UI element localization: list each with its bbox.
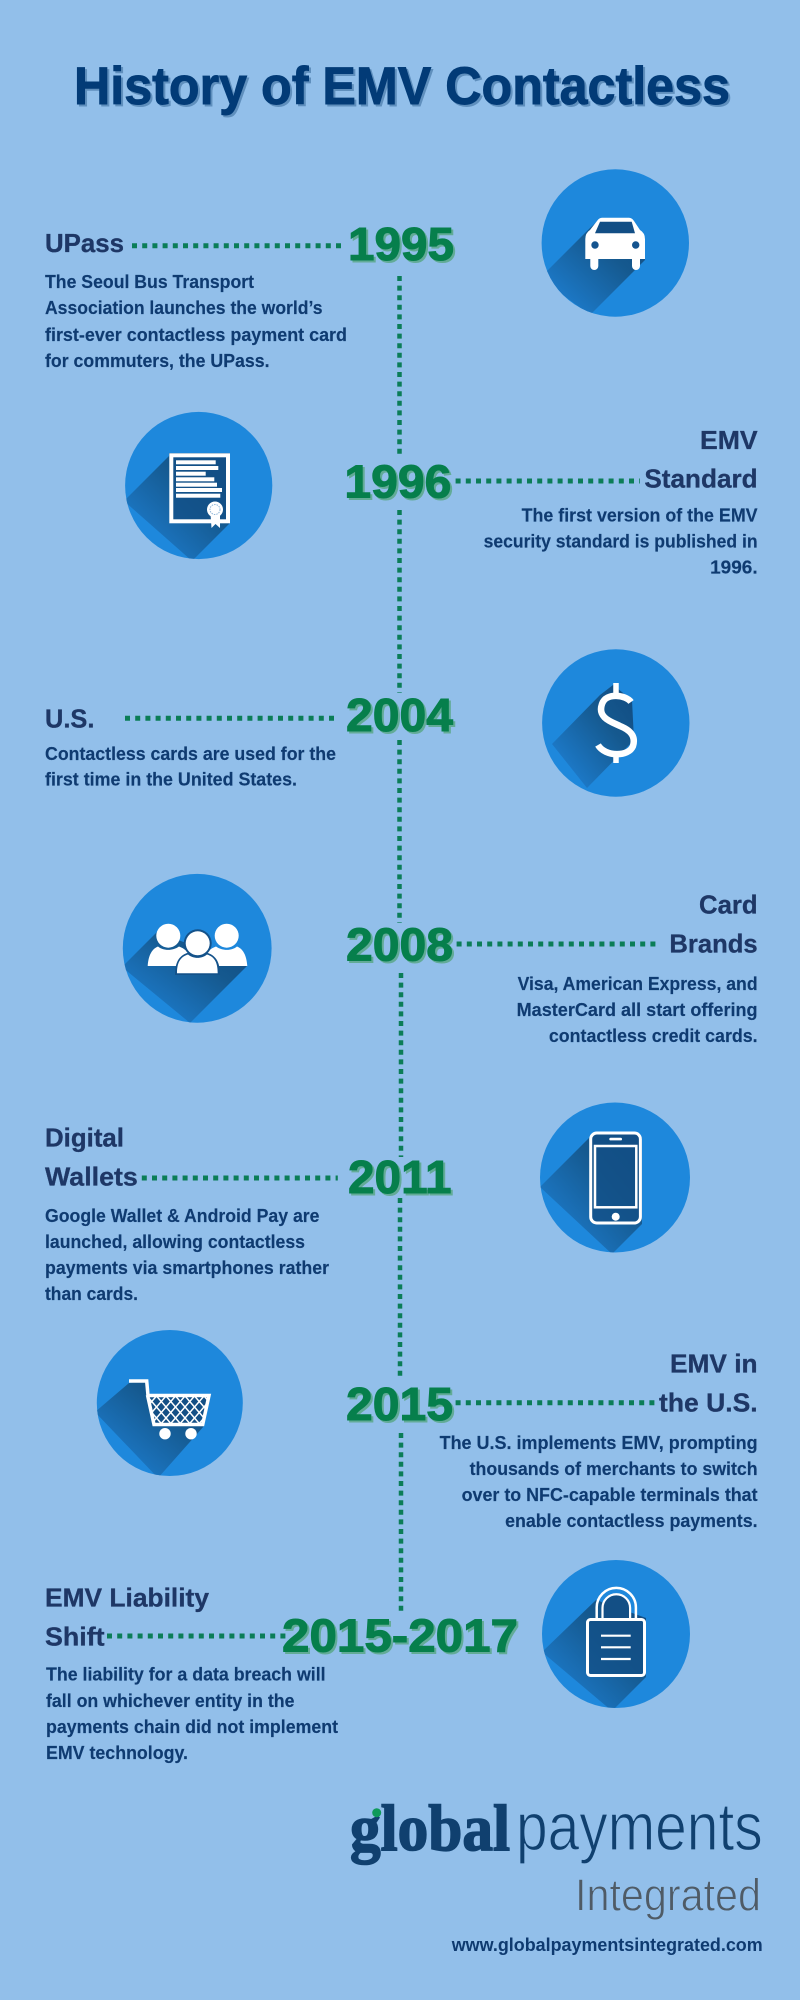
heading second line: Standard	[644, 464, 758, 494]
year: 2015-2017	[282, 1610, 518, 1662]
panel: 1995 UPass	[45, 169, 689, 371]
year: 2015	[346, 1378, 453, 1430]
body text: thousands of merchants to switch	[470, 1459, 758, 1479]
connector	[142, 1176, 338, 1180]
body text: MasterCard all start offering	[517, 1000, 758, 1020]
icon: shopping cart	[95, 1330, 243, 1478]
body text	[45, 272, 347, 371]
heading second line: Brands	[669, 928, 758, 958]
heading: Card	[699, 889, 758, 919]
icon: smartphone	[540, 1102, 690, 1254]
body text: The first version of the EMV	[522, 506, 758, 526]
body text: payments via smartphones rather	[45, 1258, 329, 1278]
body text: over to NFC-capable terminals that	[462, 1485, 758, 1505]
body text: The Seoul Bus Transport	[45, 272, 254, 292]
connector	[457, 942, 658, 946]
year: 2004	[346, 689, 453, 741]
connector	[125, 716, 334, 721]
year: 1995	[348, 218, 454, 270]
heading: EMV Liability	[45, 1583, 210, 1613]
body text	[484, 506, 758, 578]
body text: Visa, American Express, and	[518, 974, 758, 994]
body text: security standard is published in	[484, 532, 758, 552]
website url: www.globalpaymentsintegrated.com	[451, 1935, 763, 1955]
heading: EMV in	[670, 1349, 758, 1379]
logo: global payments integrated	[350, 1789, 763, 1921]
year: 2011	[348, 1151, 452, 1203]
body text: fall on whichever entity in the	[46, 1691, 294, 1711]
body text: Association launches the world’s	[45, 298, 322, 318]
heading: EMV	[700, 425, 758, 455]
body text: launched, allowing contactless	[45, 1232, 305, 1252]
connector	[456, 1400, 657, 1405]
body text: Contactless cards are used for the	[45, 744, 336, 764]
connector	[107, 1634, 288, 1638]
body text: payments chain did not implement	[46, 1717, 338, 1737]
panel: 1996 EMV Standard	[124, 412, 758, 578]
body text	[45, 1206, 329, 1304]
heading: Digital	[45, 1123, 124, 1153]
heading: U.S.	[45, 704, 94, 734]
year: 1996	[344, 456, 451, 508]
heading second line: Wallets	[45, 1162, 138, 1192]
body text: for commuters, the UPass.	[45, 351, 270, 371]
panel: 2011 Digital Wallets	[45, 1102, 690, 1304]
body text: first-ever contactless payment card	[45, 325, 347, 345]
title: History of EMV Contactless	[74, 57, 730, 116]
body text: than cards.	[45, 1284, 138, 1304]
icon: certificate	[124, 412, 272, 561]
body text	[46, 1665, 338, 1763]
connector	[132, 243, 341, 248]
timeline vertical dotted line	[400, 276, 401, 1615]
heading second line: the U.S.	[659, 1388, 758, 1418]
panel: 2008 Card Brands	[122, 874, 758, 1046]
icon: car	[540, 169, 689, 317]
icon: dollar sign	[542, 649, 690, 797]
logo wordmark global: global	[350, 1792, 510, 1865]
body text	[440, 1433, 758, 1531]
body text	[517, 974, 758, 1046]
icon: people group	[122, 874, 272, 1023]
body text: The U.S. implements EMV, prompting	[440, 1433, 758, 1453]
body text: Google Wallet & Android Pay are	[45, 1206, 320, 1226]
heading: UPass	[45, 228, 124, 258]
body text: contactless credit cards.	[549, 1026, 758, 1046]
panel: 2015 EMV in the U.S.	[95, 1330, 758, 1531]
panel: 2004 U.S.	[45, 649, 690, 797]
body text	[45, 744, 336, 790]
body text: EMV technology.	[46, 1743, 188, 1763]
body text: 1996.	[710, 558, 758, 578]
connector	[456, 478, 640, 484]
body text: first time in the United States.	[45, 770, 297, 790]
logo wordmark Integrated: Integrated	[575, 1870, 761, 1921]
body text: The liability for a data breach will	[46, 1665, 326, 1685]
heading second line: Shift	[45, 1622, 105, 1652]
panel: 2015-2017 EMV Liability Shift	[45, 1560, 690, 1763]
logo green dot	[372, 1808, 381, 1817]
year: 2008	[346, 919, 453, 971]
icon: padlock	[542, 1560, 690, 1711]
body text: enable contactless payments.	[505, 1511, 758, 1531]
